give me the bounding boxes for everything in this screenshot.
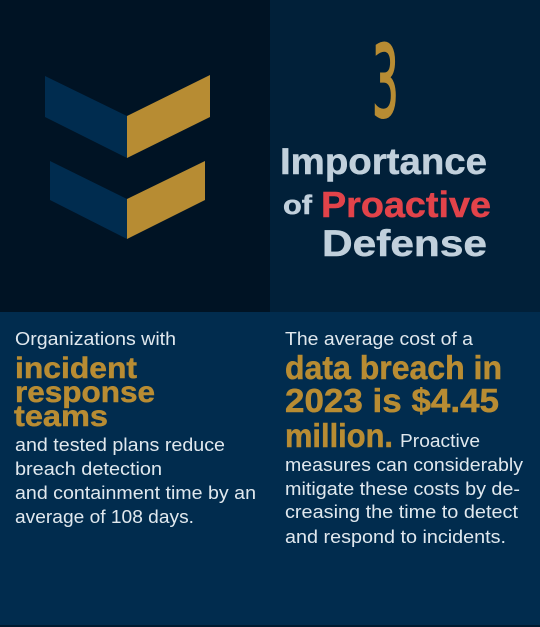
section number: 3 — [372, 25, 399, 141]
title: Importance — [280, 141, 487, 182]
text block: data breach cost: measures can considerably — [285, 455, 523, 475]
title: Proactive — [321, 184, 491, 225]
text block: data breach cost: The average cost of a — [285, 329, 474, 349]
text block: data breach cost: data breach in — [285, 349, 502, 386]
text block: data breach cost: million. — [285, 417, 393, 454]
text block: incident response teams: and tested plans reduce — [15, 435, 225, 455]
title — [280, 141, 491, 264]
text block: incident response teams: teams — [14, 400, 108, 433]
text block: incident response teams: Organizations with — [15, 329, 176, 349]
text block: incident response teams — [14, 329, 256, 527]
text block: incident response teams: incident — [15, 352, 137, 385]
text block: incident response teams: breach detection — [15, 459, 162, 479]
text block: incident response teams: and containment time by an — [15, 483, 256, 503]
text block: data breach cost: Proactive — [400, 431, 480, 451]
panel: body background — [0, 312, 540, 625]
title: Defense — [322, 223, 487, 264]
text block: data breach cost: mitigate these costs by de- — [285, 479, 520, 499]
text block: data breach cost: and respond to incidents. — [285, 527, 506, 547]
text block: data breach cost — [285, 329, 523, 547]
text block: incident response teams: response — [15, 376, 155, 409]
text block: incident response teams: average of 108 days. — [15, 507, 194, 527]
icon: double chevron — [45, 75, 210, 239]
panel: title background — [270, 0, 540, 312]
text block: data breach cost: 2023 is $4.45 — [285, 382, 499, 419]
title: of — [283, 190, 313, 220]
panel: chevron icon background — [0, 0, 270, 312]
text block: data breach cost: creasing the time to detect — [285, 502, 518, 522]
